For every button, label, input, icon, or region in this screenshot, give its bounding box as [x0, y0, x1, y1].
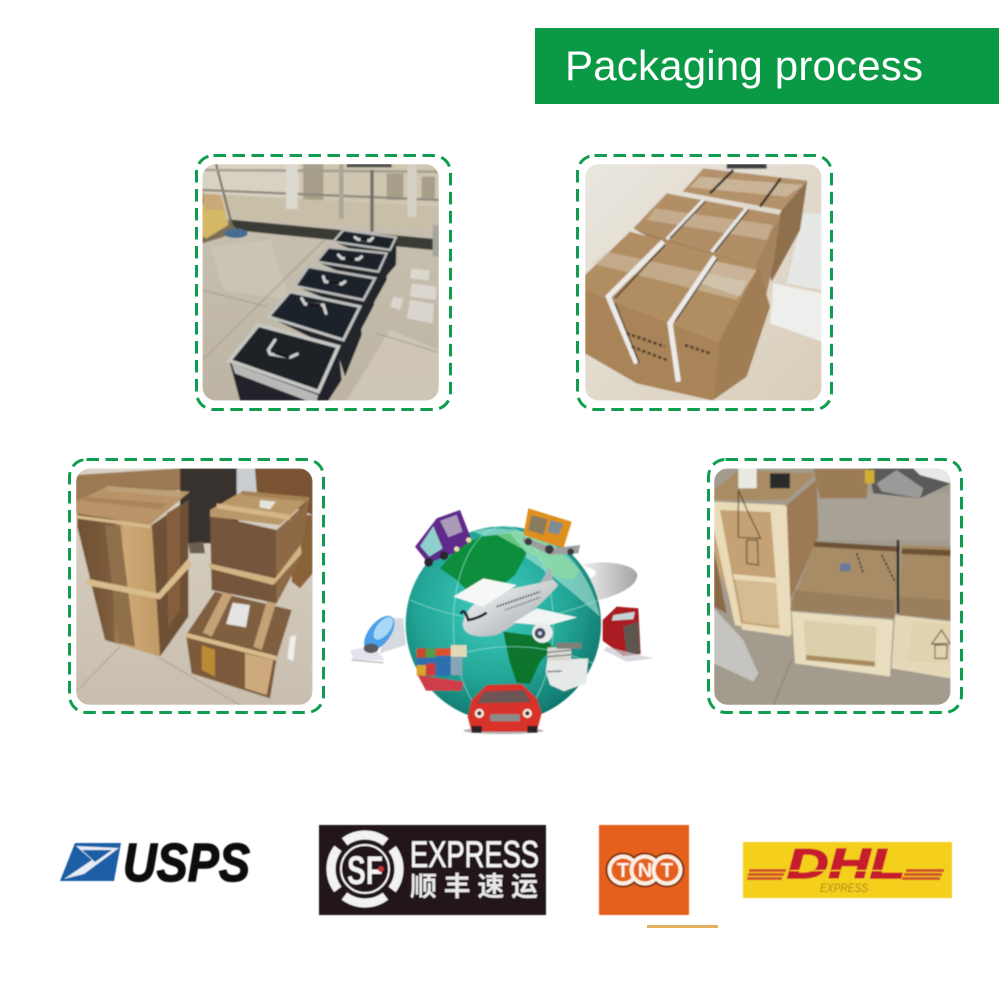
title banner: Packaging process	[535, 28, 999, 104]
logo: DHL Express: DHL	[787, 840, 905, 887]
back to front cases	[338, 242, 398, 276]
bullet train	[350, 610, 406, 663]
logo: USPS	[60, 833, 250, 893]
logo: TNT	[599, 825, 689, 915]
logo: SF Express	[319, 825, 546, 915]
red car	[463, 684, 543, 734]
logo: DHL Express	[743, 840, 952, 898]
decorative strip below TNT logo	[647, 925, 718, 928]
small crate	[186, 635, 277, 698]
panel: stacked wooden crates photo	[70, 460, 324, 712]
continents	[440, 533, 527, 592]
left crate	[152, 500, 188, 657]
bus	[415, 510, 472, 567]
globe with transport vehicles	[350, 508, 653, 734]
front box	[713, 267, 770, 400]
container ship	[417, 645, 467, 691]
swoosh shadow	[580, 562, 637, 601]
panel: plywood crates photo	[708, 460, 962, 712]
airplane	[453, 567, 577, 643]
logo: SF Express: EXPRESS	[410, 834, 539, 875]
logo: DHL Express: EXPRESS	[820, 881, 868, 895]
panel: strapped cardboard boxes photo	[578, 156, 832, 410]
logo: TNT: T	[617, 860, 629, 882]
truck	[523, 508, 580, 555]
logo: TNT: T	[661, 860, 673, 882]
middle box	[633, 215, 781, 293]
plastic bag	[714, 608, 758, 682]
center crate	[797, 546, 900, 608]
logo: SF Express: SF	[347, 849, 383, 893]
red train	[603, 607, 653, 662]
globe sphere	[406, 526, 601, 722]
logo: SF Express: 顺丰速运	[410, 872, 538, 902]
right crate	[897, 540, 899, 613]
title banner: Packaging process: Packaging process	[565, 42, 923, 89]
back box	[770, 180, 808, 282]
logo: TNT: N	[638, 860, 652, 882]
right crate	[277, 500, 309, 603]
left crate	[787, 480, 818, 600]
panel: black aluminium cases photo	[196, 156, 450, 410]
logo: USPS: USPS	[123, 833, 250, 893]
cruise ship	[546, 643, 588, 691]
